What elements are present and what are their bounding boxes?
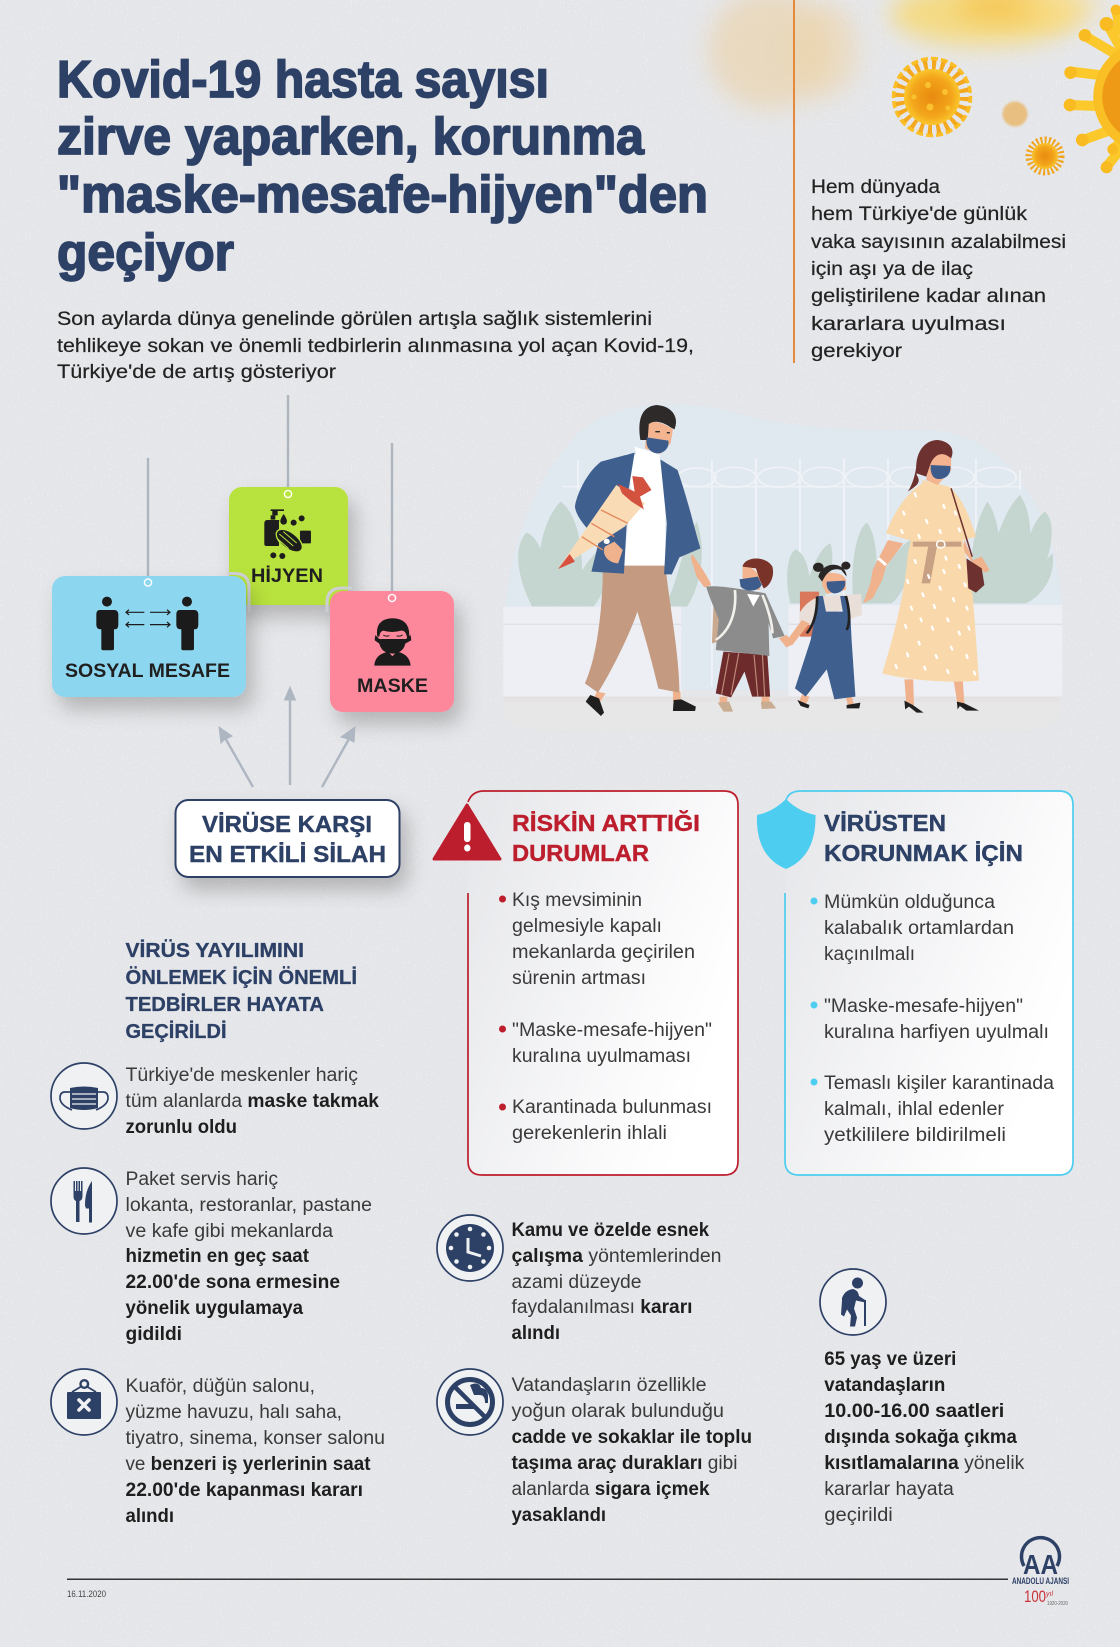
logo: anadolu ajansi: 1920-2020 bbox=[1047, 1601, 1068, 1607]
measure: restaurants: Paket servis hariç bbox=[126, 1169, 278, 1190]
planters and ground bbox=[503, 607, 681, 697]
icon: elderly person bbox=[820, 1269, 886, 1335]
right side text: kararlara uyulması bbox=[811, 314, 1006, 335]
blurred virus background bbox=[708, 0, 1100, 110]
risk list: gelmesiyle kapalı bbox=[512, 916, 662, 937]
measure: closures: ve benzeri iş yerlerinin saat bbox=[126, 1454, 371, 1475]
measure: restaurants: hizmetin en geç saat bbox=[126, 1246, 310, 1267]
footer line bbox=[67, 1578, 1008, 1580]
virus big at edge bbox=[1064, 5, 1120, 173]
logo: anadolu ajansi: ANADOLU AJANSI bbox=[1012, 1576, 1069, 1587]
measure: 65 plus: vatandaşların bbox=[824, 1375, 945, 1396]
measure: restaurants bbox=[126, 1169, 372, 1345]
arrow: up-right bbox=[322, 727, 355, 787]
fence bbox=[563, 458, 1022, 687]
panel: virüsten korunmak için bbox=[757, 791, 1073, 1175]
measure: flexible work: azami düzeyde bbox=[512, 1272, 642, 1293]
protection list: Mümkün olduğunca bbox=[824, 892, 995, 913]
icon: hand washing bbox=[264, 509, 311, 559]
panel: riskin arttığı durumlar bbox=[434, 791, 738, 1175]
panel heading bbox=[824, 810, 1023, 866]
icon: fork and knife bbox=[51, 1168, 117, 1234]
measure: flexible work bbox=[512, 1220, 722, 1344]
measure: closures: alındı bbox=[126, 1506, 174, 1527]
card: maske: MASKE bbox=[357, 675, 428, 697]
measure: masks: zorunlu oldu bbox=[126, 1117, 237, 1138]
measure: flexible work: çalışma yöntemlerinden bbox=[512, 1246, 722, 1267]
figure: mother bbox=[871, 440, 989, 713]
measure: 65 plus bbox=[824, 1349, 1025, 1526]
measure: restaurants: gidildi bbox=[126, 1324, 182, 1345]
right side text bbox=[811, 177, 1066, 362]
risk list bbox=[499, 890, 712, 1144]
family illustration bbox=[503, 404, 1062, 730]
virus cluster bbox=[894, 5, 1120, 173]
measure: flexible work: faydalanılması kararı bbox=[512, 1297, 692, 1318]
intro text: Son aylarda dünya genelinde görülen artışla sağlık sistemlerini bbox=[57, 309, 652, 330]
logo: anadolu ajansi bbox=[1012, 1538, 1069, 1607]
plants bbox=[518, 495, 1053, 607]
risk list: mekanlarda geçirilen bbox=[512, 942, 695, 963]
title: Kovid-19 hasta sayısı bbox=[57, 51, 549, 109]
backdrop blob bbox=[505, 404, 1062, 690]
risk list: "Maske-mesafe-hijyen" bbox=[512, 1020, 712, 1041]
measure: smoking ban: alanlarda sigara içmek bbox=[512, 1479, 710, 1500]
right side text: gerekiyor bbox=[811, 341, 903, 362]
risk list: Kış mevsiminin bbox=[512, 890, 642, 911]
virus small blurred bbox=[1002, 102, 1028, 126]
right side text: hem Türkiye'de günlük bbox=[811, 204, 1028, 225]
heading: virüs yayılımını: TEDBİRLER HAYATA bbox=[126, 993, 324, 1016]
intro text bbox=[57, 309, 694, 383]
measure: smoking ban: yasaklandı bbox=[512, 1505, 606, 1526]
measure: 65 plus: geçirildi bbox=[824, 1505, 893, 1526]
arrows bbox=[219, 687, 355, 787]
protection list: kalabalık ortamlardan bbox=[824, 918, 1014, 939]
heading: virüs yayılımını bbox=[126, 939, 357, 1043]
box: virüse karşı bbox=[176, 800, 400, 877]
icon: shield bbox=[757, 799, 816, 869]
protection list: Temaslı kişiler karantinada bbox=[824, 1073, 1054, 1094]
figure: girl bbox=[785, 562, 882, 708]
heading: virüs yayılımını: GEÇİRİLDİ bbox=[126, 1020, 226, 1043]
measure: restaurants: 22.00'de sona ermesine bbox=[126, 1272, 340, 1293]
box: virüse karşı: EN ETKİLİ SİLAH bbox=[189, 841, 386, 867]
risk list: Karantinada bulunması bbox=[512, 1097, 712, 1118]
measure: restaurants: ve kafe gibi mekanlarda bbox=[126, 1221, 333, 1242]
protection list: "Maske-mesafe-hijyen" bbox=[824, 996, 1023, 1017]
box: virüse karşı: VİRÜSE KARŞI bbox=[202, 811, 372, 837]
icon: two people with arrows bbox=[96, 597, 198, 650]
icon: no smoking bbox=[437, 1369, 503, 1435]
measure: smoking ban bbox=[512, 1375, 752, 1526]
protection list bbox=[810, 892, 1054, 1146]
measure: closures: 22.00'de kapanması kararı bbox=[126, 1480, 363, 1501]
measure: smoking ban: cadde ve sokaklar ile toplu bbox=[512, 1427, 752, 1448]
right side text: için aşı ya de ilaç bbox=[811, 259, 973, 280]
measure: closures: yüzme havuzu, halı saha, bbox=[126, 1402, 342, 1423]
protection list: yetkililere bildirilmeli bbox=[824, 1125, 1006, 1146]
figure: father bbox=[558, 405, 711, 716]
risk list: gerekenlerin ihlali bbox=[512, 1123, 667, 1144]
card: sosyal mesafe bbox=[52, 574, 249, 697]
right side text: vaka sayısının azalabilmesi bbox=[811, 232, 1066, 253]
icon: closed sign bbox=[51, 1369, 117, 1435]
measure: closures bbox=[126, 1376, 385, 1527]
right side text: geliştirilene kadar alınan bbox=[811, 286, 1046, 307]
measure: smoking ban: taşıma araç durakları gibi bbox=[512, 1453, 738, 1474]
arrow: up-left bbox=[219, 727, 253, 787]
logo: anadolu ajansi: 100 bbox=[1024, 1587, 1046, 1606]
measure: 65 plus: 65 yaş ve üzeri bbox=[824, 1349, 956, 1370]
heading: virüs yayılımını: ÖNLEMEK İÇİN ÖNEMLİ bbox=[126, 966, 357, 989]
measure: smoking ban: Vatandaşların özellikle bbox=[512, 1375, 706, 1396]
card: hijyen bbox=[229, 487, 348, 605]
virus large centre bbox=[894, 58, 970, 136]
virus small bbox=[1030, 141, 1060, 171]
intro text: Türkiye'de de artış gösteriyor bbox=[57, 362, 337, 383]
measure: 65 plus: kısıtlamalarına yönelik bbox=[824, 1453, 1025, 1474]
measure: flexible work: Kamu ve özelde esnek bbox=[512, 1220, 709, 1241]
measure: closures: Kuaför, düğün salonu, bbox=[126, 1376, 315, 1397]
measure: masks bbox=[126, 1065, 379, 1138]
panel heading bbox=[512, 809, 700, 866]
logo: anadolu ajansi: AA bbox=[1023, 1549, 1058, 1580]
icon: clock bbox=[437, 1215, 503, 1281]
measure: smoking ban: yoğun olarak bulunduğu bbox=[512, 1401, 724, 1422]
protection list: kalmalı, ihlal edenler bbox=[824, 1099, 1005, 1120]
protection list: kaçınılmalı bbox=[824, 944, 915, 965]
measure: 65 plus: 10.00-16.00 saatleri bbox=[824, 1401, 1004, 1422]
intro text: tehlikeye sokan ve önemli tedbirlerin alınmasına yol açan Kovid-19, bbox=[57, 336, 694, 357]
icon: mask bbox=[51, 1063, 117, 1129]
panel heading: DURUMLAR bbox=[512, 840, 649, 866]
panel heading: KORUNMAK İÇİN bbox=[824, 840, 1023, 866]
hanging strings bbox=[148, 395, 392, 594]
arrow: up bbox=[284, 687, 296, 785]
logo: anadolu ajansi: yıl bbox=[1045, 1591, 1053, 1598]
title: geçiyor bbox=[57, 224, 234, 282]
measure: masks: tüm alanlarda maske takmak bbox=[126, 1091, 379, 1112]
orange divider bbox=[793, 0, 795, 363]
card: sosyal mesafe: SOSYAL MESAFE bbox=[65, 660, 230, 682]
date: 16.11.2020 bbox=[67, 1589, 106, 1600]
risk list: sürenin artması bbox=[512, 968, 646, 989]
heading: virüs yayılımını: VİRÜS YAYILIMINI bbox=[126, 939, 304, 962]
panel heading: RİSKİN ARTTIĞI bbox=[512, 809, 700, 836]
title bbox=[57, 51, 708, 282]
icon: warning triangle bbox=[434, 805, 500, 859]
risk list: kuralına uyulmaması bbox=[512, 1046, 691, 1067]
card: hijyen: HİJYEN bbox=[251, 564, 323, 587]
measure: restaurants: lokanta, restoranlar, pastane bbox=[126, 1195, 372, 1216]
protection list: kuralına harfiyen uyulmalı bbox=[824, 1022, 1049, 1043]
gift cone bbox=[558, 485, 645, 569]
card: maske bbox=[327, 588, 454, 712]
measure: flexible work: alındı bbox=[512, 1323, 560, 1344]
figure: boy bbox=[706, 559, 794, 712]
measure: closures: tiyatro, sinema, konser salonu bbox=[126, 1428, 385, 1449]
title: "maske-mesafe-hijyen"den bbox=[57, 166, 708, 224]
icon: masked person bbox=[374, 618, 411, 666]
title: zirve yaparken, korunma bbox=[57, 108, 645, 166]
right side text: Hem dünyada bbox=[811, 177, 940, 198]
panel heading: VİRÜSTEN bbox=[824, 810, 946, 836]
measure: restaurants: yönelik uygulamaya bbox=[126, 1298, 303, 1319]
measure: 65 plus: dışında sokağa çıkma bbox=[824, 1427, 1017, 1448]
measure: 65 plus: kararlar hayata bbox=[824, 1479, 954, 1500]
measure: masks: Türkiye'de meskenler hariç bbox=[126, 1065, 358, 1086]
